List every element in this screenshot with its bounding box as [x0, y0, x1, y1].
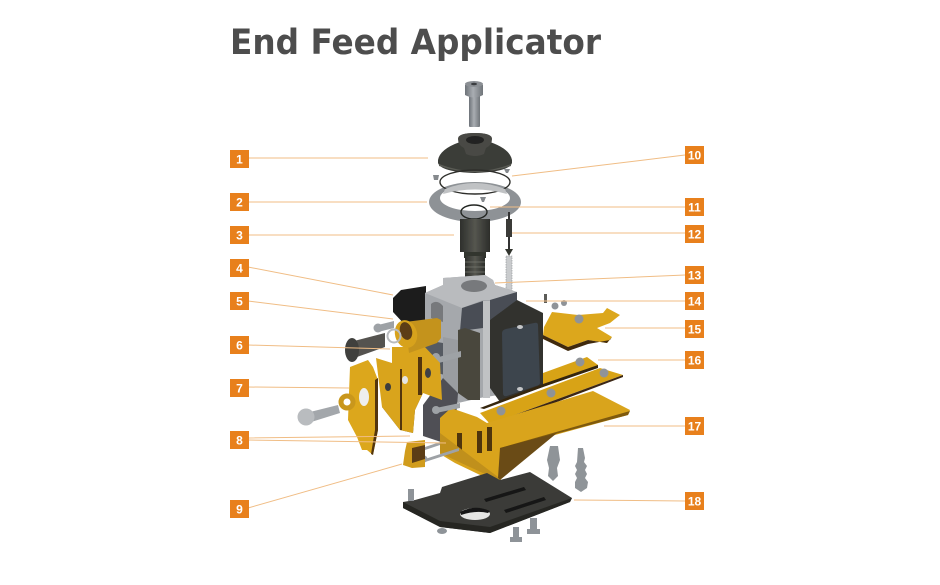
part: gold plate left [348, 360, 378, 455]
part: cap screw [465, 81, 483, 127]
leader and label 15: 15 [688, 322, 701, 336]
part: upper gold strip [543, 357, 598, 387]
leader and label 7 [230, 379, 349, 397]
part: strip nuts [496, 358, 608, 416]
part: gold plate centre details [385, 357, 431, 430]
part: main block [425, 275, 517, 403]
part: small o-ring [461, 205, 487, 219]
part: threaded stud [460, 219, 490, 292]
leader and label 11 [490, 198, 704, 216]
part: flag plate nuts [544, 294, 584, 324]
leader and label 12: 12 [688, 228, 701, 242]
leader and label 2: 2 [236, 196, 243, 210]
part: lower strip edge [490, 375, 623, 427]
part: solenoid housing [490, 300, 543, 402]
leader and label 10 [512, 146, 704, 176]
leader and label 2 [230, 193, 427, 211]
leader and label 16 [598, 351, 704, 369]
leader and label 6: 6 [236, 338, 243, 352]
leader and label 14 [526, 292, 704, 310]
leader and label 8 [230, 431, 446, 449]
part: base plate screws [408, 489, 540, 542]
leader and label 15 [605, 320, 704, 338]
part: flag plate [543, 308, 620, 351]
leader and label 12 [512, 225, 704, 243]
leader and label 14: 14 [688, 294, 701, 308]
part: knob [438, 133, 512, 173]
part: gold plate centre [376, 345, 442, 433]
part: bracket rear [382, 388, 423, 433]
part: gold strip dark edge [480, 365, 598, 409]
leader and label 7: 7 [236, 382, 243, 396]
part: o-ring [440, 170, 510, 194]
leader and label 18 [574, 492, 704, 510]
leader and label 1: 1 [236, 152, 243, 166]
leader and label 11: 11 [688, 200, 701, 214]
title: End Feed Applicator [230, 23, 602, 63]
part: screw heads [374, 321, 461, 462]
leader and label 13 [495, 266, 704, 284]
leader and label 5: 5 [236, 294, 243, 308]
part: inner ring band [443, 183, 507, 194]
part: front bar [458, 328, 480, 400]
leader and label 1 [230, 150, 428, 168]
exploded applicator assembly [298, 81, 630, 542]
leader and label 13: 13 [688, 268, 701, 282]
leader and label 10: 10 [688, 148, 701, 162]
leader and label 3 [230, 226, 454, 244]
part: indexed ring [429, 182, 521, 222]
leader and label 17: 17 [688, 420, 701, 434]
part: lower dark block [423, 378, 458, 442]
part: base plate [403, 472, 572, 533]
leader and label 16: 16 [688, 354, 701, 368]
leader and label 4: 4 [236, 262, 243, 276]
leader and label 8: 8 [236, 434, 243, 448]
part: small screws [433, 169, 510, 202]
leader and label 17 [604, 417, 704, 435]
leader and label 6 [230, 336, 390, 354]
part: gold bushing [388, 318, 441, 353]
part: long screw and pin [298, 333, 385, 426]
part: left plate details [338, 378, 378, 455]
leader and label 9 [230, 464, 402, 518]
leader and label 5 [230, 292, 393, 319]
part: spring pin [505, 212, 513, 291]
leader and label 4 [230, 259, 393, 295]
leader and label 9: 9 [236, 502, 243, 516]
part: expansion springs [547, 446, 588, 492]
part: gold clamp [403, 440, 425, 468]
part: black backing [393, 286, 426, 332]
part: lower gold strip [480, 368, 623, 424]
leader and label 18: 18 [688, 494, 701, 508]
part: gold base [440, 391, 630, 485]
leader and label 3: 3 [236, 228, 243, 242]
